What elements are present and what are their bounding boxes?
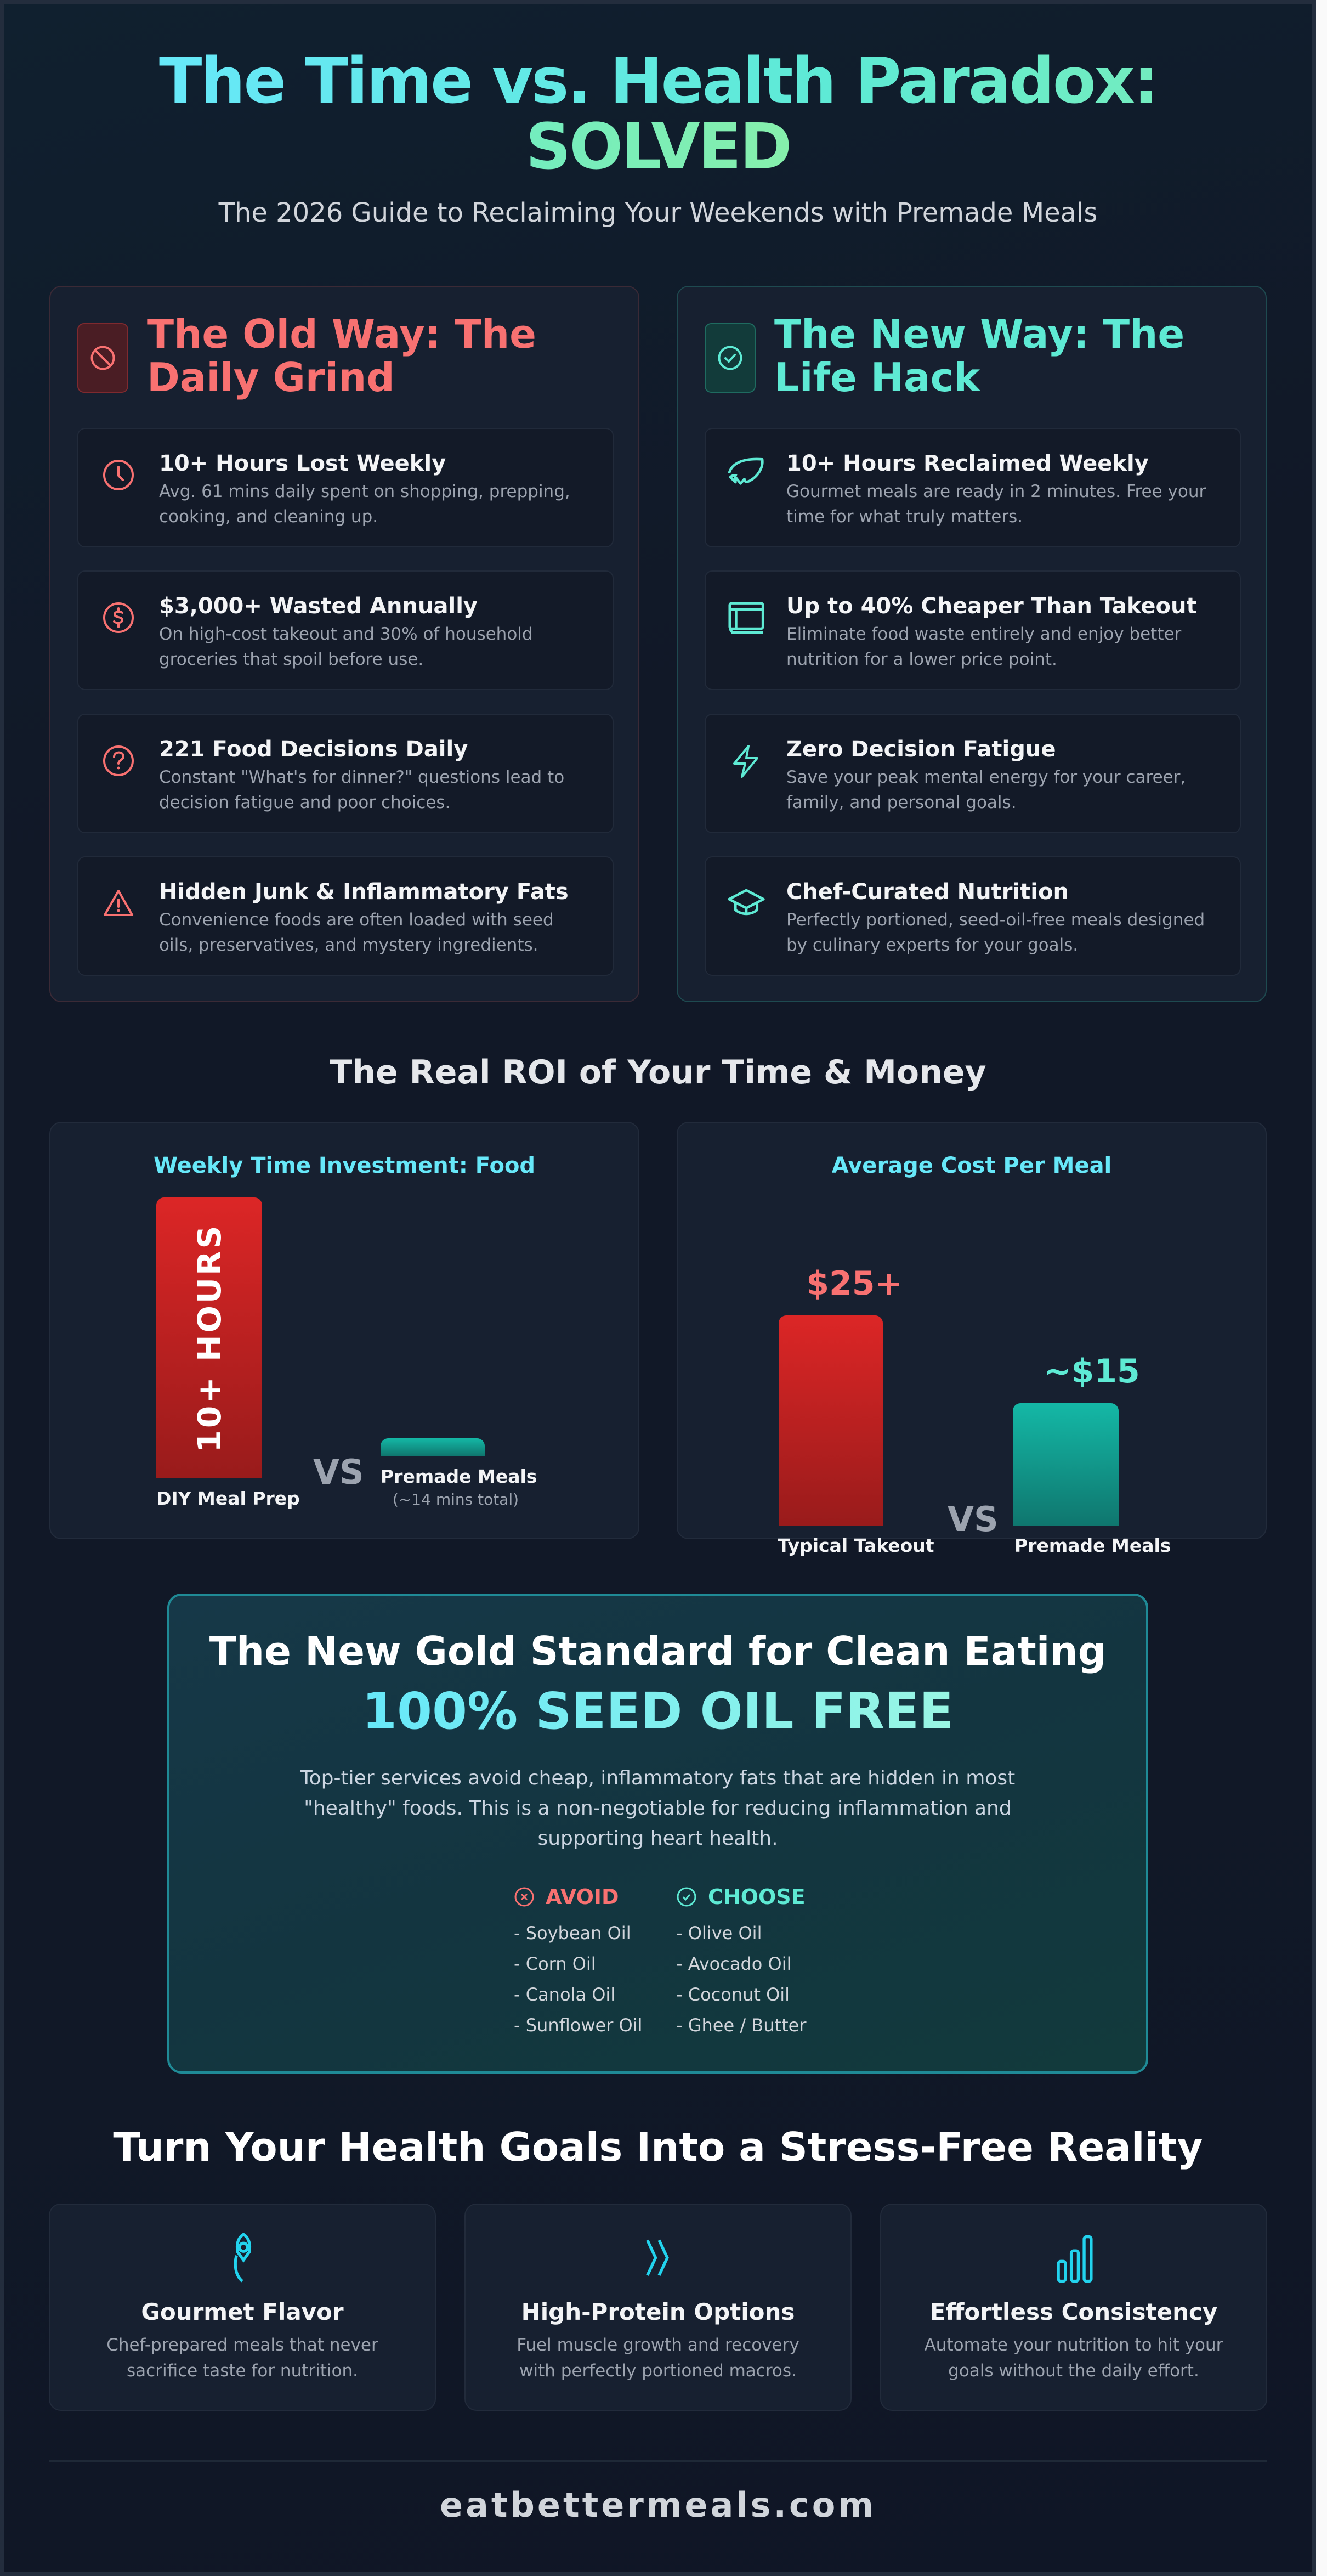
- card: gourmet flavor: sacrifice taste for nutrition.: [127, 2361, 358, 2381]
- callout: seed oil free: supporting heart health.: [537, 1827, 778, 1850]
- item: cheaper: Eliminate food waste entirely and enjoy better: [786, 624, 1181, 644]
- vs: VS: [313, 1452, 364, 1492]
- card: consistency: goals without the daily effort.: [948, 2361, 1199, 2381]
- card: gourmet flavor: Gourmet Flavor: [141, 2298, 344, 2325]
- list: avoid: - Canola Oil: [514, 1984, 615, 2005]
- bar: takeout: [779, 1315, 883, 1526]
- callout: seed oil free: [167, 1594, 1148, 2074]
- chart: cost per meal: [677, 1122, 1267, 1539]
- item: wasted: [77, 570, 614, 690]
- icon: clock: [103, 460, 134, 490]
- text: VS: [948, 1499, 999, 1539]
- list: choose: CHOOSE: [708, 1885, 806, 1909]
- list: avoid: [514, 1885, 642, 2036]
- card: gourmet flavor: [49, 2204, 436, 2411]
- heading: new way: The New Way: The: [774, 311, 1184, 357]
- list: choose: - Avocado Oil: [676, 1953, 791, 1974]
- card: consistency: [880, 2204, 1267, 2411]
- text: DIY Meal Prep: [156, 1488, 300, 1509]
- item: decisions: decision fatigue and poor choices.: [159, 793, 450, 812]
- item: fatigue: Zero Decision Fatigue: [786, 737, 1056, 762]
- text: Typical Takeout: [778, 1535, 934, 1556]
- card: consistency: Effortless Consistency: [930, 2298, 1217, 2325]
- panel: old way: [49, 286, 639, 1002]
- item: hours lost: [77, 428, 614, 547]
- list: choose: [676, 1885, 807, 2036]
- heading: ROI: The Real ROI of Your Time & Money: [330, 1053, 986, 1092]
- icon: ban: [77, 323, 128, 393]
- icon: cap: [728, 889, 765, 915]
- chart: weekly time: [49, 1122, 639, 1539]
- bar: DIY: [156, 1197, 262, 1478]
- footer: website: eatbettermeals.com: [440, 2485, 876, 2525]
- item: fatigue: Save your peak mental energy for your career,: [786, 767, 1186, 787]
- item: hours lost: Avg. 61 mins daily spent on shopping, prepping,: [159, 482, 570, 501]
- icon: bars: [1057, 2235, 1093, 2283]
- heading: goals: Turn Your Health Goals Into a Stress-Free Reality: [113, 2124, 1203, 2170]
- item: reclaimed: 10+ Hours Reclaimed Weekly: [786, 451, 1149, 476]
- item: hours lost: cooking, and cleaning up.: [159, 507, 378, 527]
- chart: cost per meal: Average Cost Per Meal: [832, 1153, 1111, 1178]
- panel: new way: [677, 286, 1267, 1002]
- card: high protein: with perfectly portioned macros.: [519, 2361, 797, 2381]
- item: reclaimed: time for what truly matters.: [786, 507, 1023, 527]
- icon: dollar: [103, 602, 134, 633]
- item: junk: oils, preservatives, and mystery ingredients.: [159, 935, 538, 955]
- list: choose: - Ghee / Butter: [676, 2015, 806, 2036]
- text: (~14 mins total): [393, 1490, 519, 1509]
- title: SOLVED: [525, 110, 791, 184]
- icon: warning: [104, 890, 134, 916]
- item: fatigue: family, and personal goals.: [786, 793, 1017, 812]
- item: wasted: groceries that spoil before use.: [159, 649, 423, 669]
- heading: old way: Daily Grind: [147, 354, 395, 400]
- bar: DIY: 10+ HOURS: [191, 1223, 228, 1452]
- heading: old way: The Old Way: The: [147, 311, 536, 357]
- icon: chef: [234, 2233, 251, 2283]
- item: wasted: $3,000+ Wasted Annually: [159, 594, 478, 619]
- item: junk: Hidden Junk & Inflammatory Fats: [159, 879, 569, 905]
- callout: seed oil free: "healthy" foods. This is a non-negotiable for reducing inflammation and: [304, 1797, 1012, 1820]
- item: cheaper: [705, 570, 1241, 690]
- item: nutrition: by culinary experts for your goals.: [786, 935, 1078, 955]
- item: nutrition: Perfectly portioned, seed-oil-free meals designed: [786, 910, 1205, 930]
- item: wasted: On high-cost takeout and 30% of household: [159, 624, 533, 644]
- icon: check: [705, 323, 756, 393]
- icon: question: [103, 745, 134, 776]
- chart: weekly time: Weekly Time Investment: Food: [154, 1153, 535, 1178]
- text: $25+: [806, 1264, 903, 1303]
- heading: old way: [147, 311, 536, 400]
- heading: new way: Life Hack: [774, 354, 980, 400]
- list: avoid: - Corn Oil: [514, 1953, 596, 1974]
- card: high protein: High-Protein Options: [521, 2298, 795, 2325]
- item: junk: [77, 856, 614, 976]
- item: cheaper: nutrition for a lower price point.: [786, 649, 1057, 669]
- item: nutrition: [705, 856, 1241, 976]
- list: avoid: - Sunflower Oil: [514, 2015, 642, 2036]
- bar: premade time: [381, 1438, 485, 1456]
- labels: Premade Meals: [381, 1466, 537, 1487]
- text: Premade Meals: [1014, 1535, 1171, 1556]
- item: reclaimed: [705, 428, 1241, 547]
- card: high protein: Fuel muscle growth and recovery: [517, 2335, 799, 2355]
- item: decisions: [77, 714, 614, 833]
- card: consistency: Automate your nutrition to hit your: [925, 2335, 1223, 2355]
- subtitle: The 2026 Guide to Reclaiming Your Weekends with Premade Meals: [219, 197, 1097, 228]
- callout: seed oil free: The New Gold Standard for Clean Eating: [209, 1628, 1106, 1674]
- title: [159, 44, 1157, 184]
- item: decisions: 221 Food Decisions Daily: [159, 737, 468, 762]
- item: reclaimed: Gourmet meals are ready in 2 minutes. Free your: [786, 482, 1206, 501]
- title: The Time vs. Health Paradox:: [159, 44, 1157, 118]
- list: choose: - Olive Oil: [676, 1923, 762, 1944]
- list: avoid: AVOID: [546, 1885, 619, 1909]
- item: fatigue: [705, 714, 1241, 833]
- item: cheaper: Up to 40% Cheaper Than Takeout: [786, 594, 1197, 619]
- list: choose: - Coconut Oil: [676, 1984, 790, 2005]
- card: gourmet flavor: Chef-prepared meals that never: [106, 2335, 378, 2355]
- card: high protein: [464, 2204, 852, 2411]
- text: ~$15: [1044, 1352, 1140, 1391]
- heading: new way: [774, 311, 1184, 400]
- item: decisions: Constant "What's for dinner?" questions lead to: [159, 767, 564, 787]
- icon: hand: [728, 457, 764, 485]
- item: hours lost: 10+ Hours Lost Weekly: [159, 451, 446, 476]
- item: junk: Convenience foods are often loaded with seed: [159, 910, 554, 930]
- icon: lightning: [733, 745, 759, 778]
- icon: tray: [728, 602, 764, 634]
- callout: seed oil free: 100% SEED OIL FREE: [362, 1682, 954, 1741]
- callout: seed oil free: Top-tier services avoid cheap, inflammatory fats that are hidden in most: [300, 1767, 1015, 1789]
- bar: premade cost: [1013, 1403, 1119, 1526]
- item: nutrition: Chef-Curated Nutrition: [786, 879, 1069, 905]
- list: avoid: - Soybean Oil: [514, 1923, 631, 1944]
- icon: chevrons: [646, 2239, 669, 2276]
